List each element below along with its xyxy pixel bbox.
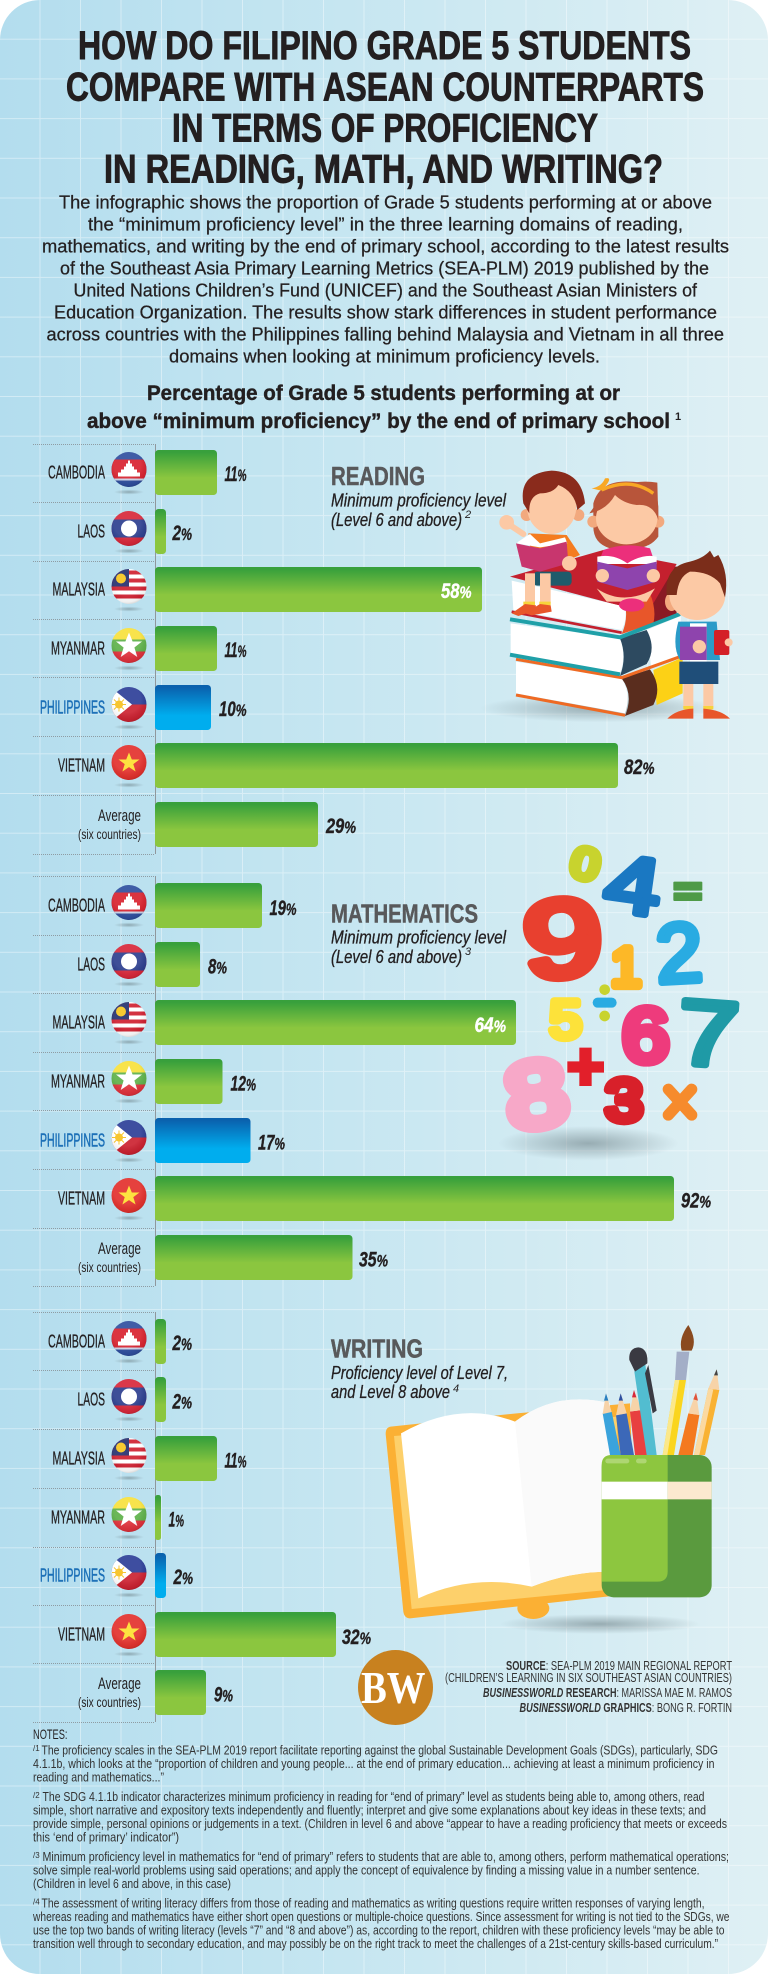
bar [155, 1612, 336, 1657]
heading: mathematics: MATHEMATICS [331, 898, 478, 928]
country label: MALAYSIA [52, 1012, 105, 1032]
icon: Malaysia flag [111, 568, 147, 612]
text block: introduction: of the Southeast Asia Primary Learning Metrics (SEA-PLM) 2019 published by the [60, 258, 709, 278]
bar [155, 1000, 516, 1045]
heading: writing: Proficiency level of Level 7, [331, 1363, 508, 1383]
text block: introduction: mathematics, and writing by the end of primary school, according to the latest results [42, 236, 729, 256]
heading: writing: 4 [453, 1383, 459, 1395]
icon: Philippines flag [111, 686, 147, 730]
bar [155, 1377, 166, 1422]
country label: MALAYSIA [52, 578, 105, 600]
text block: notes [32, 1726, 729, 1951]
heading: reading: 2 [464, 509, 471, 521]
text block: source and credits [445, 1658, 732, 1715]
title: IN TERMS OF PROFICIENCY [172, 106, 598, 150]
text block: introduction: Education Organization. The results show stark differences in student performance [54, 302, 717, 322]
heading: chart subtitle: above “minimum proficiency” by the end of primary school [87, 410, 670, 433]
illustration: colourful numbers: 6 [622, 994, 669, 1077]
note 2: this ‘end of primary’ indicator”) [33, 1830, 179, 1844]
panel: reading chart [33, 444, 733, 854]
average label [78, 1239, 141, 1275]
bar [155, 1495, 161, 1540]
country label: CAMBODIA [48, 462, 105, 482]
icon: Malaysia flag [111, 1438, 147, 1480]
value: 2% [172, 1390, 192, 1414]
text block: introduction: The infographic shows the proportion of Grade 5 students performing at or above [59, 192, 712, 212]
row: Myanmar mathematics [51, 1059, 256, 1104]
illustration: colourful numbers: 9 [519, 875, 606, 1002]
heading: mathematics: 3 [465, 946, 472, 958]
row: Philippines reading [40, 685, 246, 730]
illustration: colourful numbers: 8 [499, 1040, 574, 1150]
illustration: colourful numbers: 1 [611, 936, 641, 998]
note 3: (Children in level 6 and above, in this case) [33, 1876, 231, 1891]
country label: LAOS [78, 1388, 105, 1410]
row: Malaysia mathematics [52, 1000, 516, 1045]
value: 19% [270, 897, 296, 920]
bar [155, 1176, 674, 1221]
value: 9% [214, 1684, 233, 1706]
text block: source and credits: BUSINESSWORLD GRAPHICS: BONG R. FORTIN [520, 1700, 732, 1715]
panel: mathematics chart [33, 837, 742, 1286]
illustration: children reading on stacked books [480, 471, 733, 722]
bar [155, 1319, 166, 1364]
country label: CAMBODIA [48, 1330, 105, 1352]
icon: Vietnam flag [111, 1178, 147, 1220]
row: Vietnam writing [58, 1612, 371, 1657]
average label [78, 806, 141, 842]
country label: MALAYSIA [52, 1448, 105, 1468]
row: Vietnam mathematics [58, 1176, 711, 1221]
text block: introduction: the “minimum proficiency level” in the three learning domains of reading, [88, 214, 683, 234]
note 3 [33, 1849, 729, 1891]
bar [155, 743, 618, 788]
row: Malaysia writing [52, 1436, 246, 1481]
value: 17% [258, 1132, 285, 1154]
row: Philippines mathematics [40, 1118, 285, 1163]
note 1 [33, 1742, 718, 1784]
country label: MYANMAR [51, 1506, 105, 1528]
country label: MYANMAR [51, 1070, 105, 1092]
panel: writing chart [33, 1312, 719, 1722]
icon: Cambodia flag [111, 1320, 147, 1364]
icon: Cambodia flag [111, 884, 147, 928]
heading: writing: WRITING [331, 1334, 423, 1364]
row: average mathematics [78, 1235, 388, 1280]
row: Laos writing [78, 1377, 192, 1422]
illustration: colourful numbers: 0 [566, 837, 605, 891]
heading: reading: READING [331, 461, 425, 491]
icon: Myanmar flag [111, 628, 147, 670]
note 4: /4 [33, 1898, 40, 1906]
row: Cambodia writing [48, 1319, 192, 1364]
country label: VIETNAM [58, 1624, 105, 1644]
country label: LAOS [78, 954, 105, 974]
value: 92% [681, 1190, 711, 1212]
heading: chart subtitle [87, 382, 681, 433]
row: Laos reading [78, 509, 192, 554]
text block: introduction [42, 192, 729, 366]
row: Cambodia reading [48, 450, 246, 495]
note 2 [33, 1789, 727, 1844]
heading: mathematics [331, 898, 507, 967]
country label: PHILIPPINES [40, 1130, 105, 1150]
bar [155, 1118, 250, 1163]
illustration: colourful numbers: 3 [605, 1069, 643, 1134]
bar [155, 567, 482, 612]
value: 11% [224, 463, 246, 486]
note 2: /2 [33, 1791, 40, 1800]
row: Cambodia mathematics [48, 883, 296, 928]
icon: Laos flag [111, 1378, 147, 1422]
heading: reading: Minimum proficiency level [331, 490, 507, 510]
bar [155, 1670, 206, 1715]
heading: reading [331, 461, 507, 530]
row: Laos mathematics [78, 942, 227, 987]
icon: Vietnam flag [111, 1614, 147, 1656]
country label: VIETNAM [58, 754, 105, 776]
bar [155, 1059, 222, 1104]
icon: Philippines flag [111, 1120, 147, 1162]
row: Vietnam reading [58, 743, 654, 788]
heading: writing [331, 1334, 508, 1402]
icon: Myanmar flag [111, 1060, 147, 1104]
country label: MYANMAR [51, 638, 105, 658]
heading: chart subtitle: Percentage of Grade 5 students performing at or [147, 382, 620, 405]
bar [155, 626, 217, 671]
average label: (six countries) [78, 826, 141, 842]
row: average reading [78, 802, 356, 847]
value: 10% [219, 698, 246, 721]
average label: Average [98, 1239, 141, 1258]
row: Myanmar reading [51, 626, 246, 671]
icon: Philippines flag [111, 1554, 147, 1598]
average label: (six countries) [78, 1694, 141, 1710]
bar [155, 685, 211, 730]
value: 8% [208, 956, 227, 978]
icon: Laos flag [111, 944, 147, 986]
icon: Cambodia flag [111, 452, 147, 494]
value: 35% [359, 1248, 388, 1272]
bar [155, 942, 200, 987]
heading: mathematics: Minimum proficiency level [331, 928, 507, 948]
country label: PHILIPPINES [40, 1564, 105, 1586]
country label: VIETNAM [58, 1188, 105, 1208]
country label: LAOS [78, 520, 105, 542]
icon: Malaysia flag [111, 1002, 147, 1044]
row: Philippines writing [40, 1553, 193, 1598]
value: 2% [172, 1332, 192, 1355]
bar [155, 450, 217, 495]
value: 11% [224, 1450, 246, 1472]
icon: Laos flag [111, 510, 147, 554]
illustration: open book and pencil cup [386, 1325, 719, 1634]
text block: introduction: United Nations Children’s Fund (UNICEF) and the Southeast Asian Ministers of [74, 280, 698, 300]
country label: CAMBODIA [48, 894, 105, 916]
average label: (six countries) [78, 1259, 141, 1275]
row: average writing [78, 1670, 233, 1715]
value: 2% [173, 1566, 193, 1589]
value: 12% [230, 1072, 256, 1096]
note 3: /3 [33, 1851, 40, 1860]
value: 1% [168, 1508, 184, 1532]
value: 64% [474, 1014, 506, 1037]
note 4 [32, 1896, 729, 1951]
illustration: colourful numbers [498, 837, 742, 1161]
bar [155, 802, 318, 847]
heading: mathematics: (Level 6 and above) [331, 947, 462, 967]
logo: BusinessWorld [358, 1650, 433, 1725]
value: 32% [342, 1626, 371, 1649]
row: Myanmar writing [51, 1495, 184, 1540]
bar [155, 1553, 166, 1598]
average label [78, 1674, 141, 1710]
logo: BusinessWorld: BW [361, 1662, 426, 1713]
value: 11% [224, 639, 246, 662]
icon: Vietnam flag [111, 744, 147, 788]
illustration: colourful numbers: 5 [549, 989, 582, 1049]
value: 82% [624, 756, 654, 779]
country label: PHILIPPINES [40, 696, 105, 718]
heading: chart subtitle: 1 [675, 411, 681, 423]
value: 2% [172, 522, 192, 545]
value: 29% [325, 815, 356, 838]
text block: introduction: across countries with the Philippines falling behind Malaysia and Vietnam in all three [46, 324, 724, 344]
icon: Myanmar flag [111, 1496, 147, 1540]
row: Malaysia reading [52, 567, 482, 612]
bar [155, 1436, 217, 1481]
value: 58% [441, 580, 472, 603]
bar [155, 1235, 352, 1280]
average label: Average [98, 1674, 141, 1693]
note 1: /1 [33, 1744, 40, 1753]
bar [155, 509, 166, 554]
illustration: colourful numbers: 2 [654, 906, 705, 1001]
title [66, 24, 704, 192]
bar [155, 883, 262, 928]
note 1: reading and mathematics...” [33, 1770, 164, 1784]
illustration: colourful numbers: 7 [674, 981, 742, 1087]
average label: Average [98, 806, 141, 825]
illustration: colourful numbers: 4 [599, 838, 667, 934]
heading: reading: (Level 6 and above) [331, 510, 462, 530]
text block: notes: NOTES: [33, 1726, 68, 1742]
text block: introduction: domains when looking at minimum proficiency levels. [169, 346, 600, 366]
heading: writing: and Level 8 above [331, 1382, 450, 1402]
